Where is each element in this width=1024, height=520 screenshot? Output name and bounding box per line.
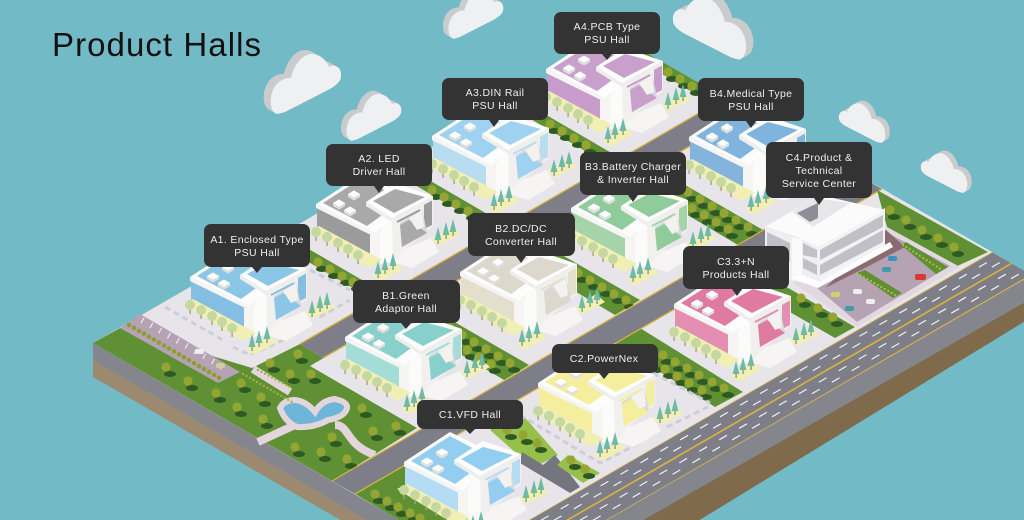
callout B4: B4.Medical Type bbox=[710, 88, 792, 100]
callout B3: B3.Battery Charger bbox=[585, 161, 681, 173]
callout B3 bbox=[580, 152, 686, 202]
hall C1 bbox=[397, 432, 549, 520]
cloud 1 bbox=[264, 50, 341, 114]
hall A3 bbox=[425, 106, 577, 214]
side road and lawns by C1 bbox=[490, 412, 558, 468]
parking lot A bbox=[120, 314, 240, 383]
garden paths bbox=[253, 369, 375, 455]
park trees bbox=[161, 349, 406, 469]
strip trees bbox=[313, 67, 843, 520]
callout B1: B1.Green bbox=[382, 290, 430, 302]
callout A2 bbox=[326, 144, 432, 193]
callout A3: PSU Hall bbox=[472, 100, 518, 112]
callout C3: Products Hall bbox=[702, 269, 770, 281]
clouds bbox=[264, 0, 972, 193]
callout A1: PSU Hall bbox=[234, 247, 280, 259]
main highway bbox=[529, 252, 1024, 520]
fences bbox=[165, 270, 712, 463]
hall C4 bbox=[765, 195, 893, 288]
callout B2: Converter Hall bbox=[485, 236, 557, 248]
roads bbox=[300, 98, 882, 494]
callout C2: C2.PowerNex bbox=[570, 353, 639, 365]
hall B1 bbox=[338, 307, 490, 415]
callout B1 bbox=[353, 280, 460, 329]
callout B4 bbox=[698, 78, 804, 128]
callout C2 bbox=[552, 344, 658, 379]
parking lot C bbox=[817, 230, 950, 322]
cloud 4 bbox=[673, 0, 753, 60]
hall C2 bbox=[531, 353, 683, 461]
cloud 5 bbox=[839, 101, 890, 143]
pond bbox=[280, 399, 347, 427]
callout C4: Technical bbox=[796, 165, 842, 177]
hall C3 bbox=[667, 274, 819, 382]
callout C4 bbox=[766, 142, 872, 205]
callout A1: A1. Enclosed Type bbox=[210, 234, 304, 246]
callout A1 bbox=[204, 224, 310, 273]
callout A2: Driver Hall bbox=[353, 166, 405, 178]
callout A4: A4.PCB Type bbox=[574, 21, 640, 33]
callout C3 bbox=[683, 246, 789, 296]
park and parking bbox=[93, 314, 417, 481]
callout B4: PSU Hall bbox=[728, 101, 774, 113]
hall B2 bbox=[453, 242, 605, 350]
cloud 6 bbox=[921, 151, 972, 193]
callout A2: A2. LED bbox=[358, 153, 400, 165]
hall A4 bbox=[539, 39, 691, 147]
C4 windows bbox=[767, 215, 883, 275]
green strips between halls bbox=[271, 49, 855, 520]
C4 surroundings bbox=[793, 190, 988, 327]
hall A2 bbox=[309, 174, 461, 282]
hall B3 bbox=[564, 178, 716, 286]
callout C1 bbox=[417, 400, 523, 434]
park lawn bbox=[93, 328, 417, 481]
callout C4: C4.Product & bbox=[786, 152, 852, 164]
hall A1 bbox=[183, 247, 335, 355]
callout C1: C1.VFD Hall bbox=[439, 409, 501, 421]
park hedges bbox=[243, 370, 292, 402]
hall B4 bbox=[682, 107, 834, 215]
callout C4: Service Center bbox=[782, 178, 856, 190]
callout B3: & Inverter Hall bbox=[597, 174, 669, 186]
callout B2 bbox=[468, 213, 575, 263]
callout B1: Adaptor Hall bbox=[375, 303, 437, 315]
callout A3 bbox=[442, 78, 548, 127]
cloud 2 bbox=[341, 91, 401, 141]
callout A4: PSU Hall bbox=[584, 34, 630, 46]
title: Product Halls bbox=[52, 26, 261, 63]
cloud 3 bbox=[443, 0, 503, 39]
callout C3: C3.3+N bbox=[717, 256, 755, 268]
callout A4 bbox=[554, 12, 660, 60]
callout B2: B2.DC/DC bbox=[495, 223, 547, 235]
callout A3: A3.DIN Rail bbox=[466, 87, 524, 99]
